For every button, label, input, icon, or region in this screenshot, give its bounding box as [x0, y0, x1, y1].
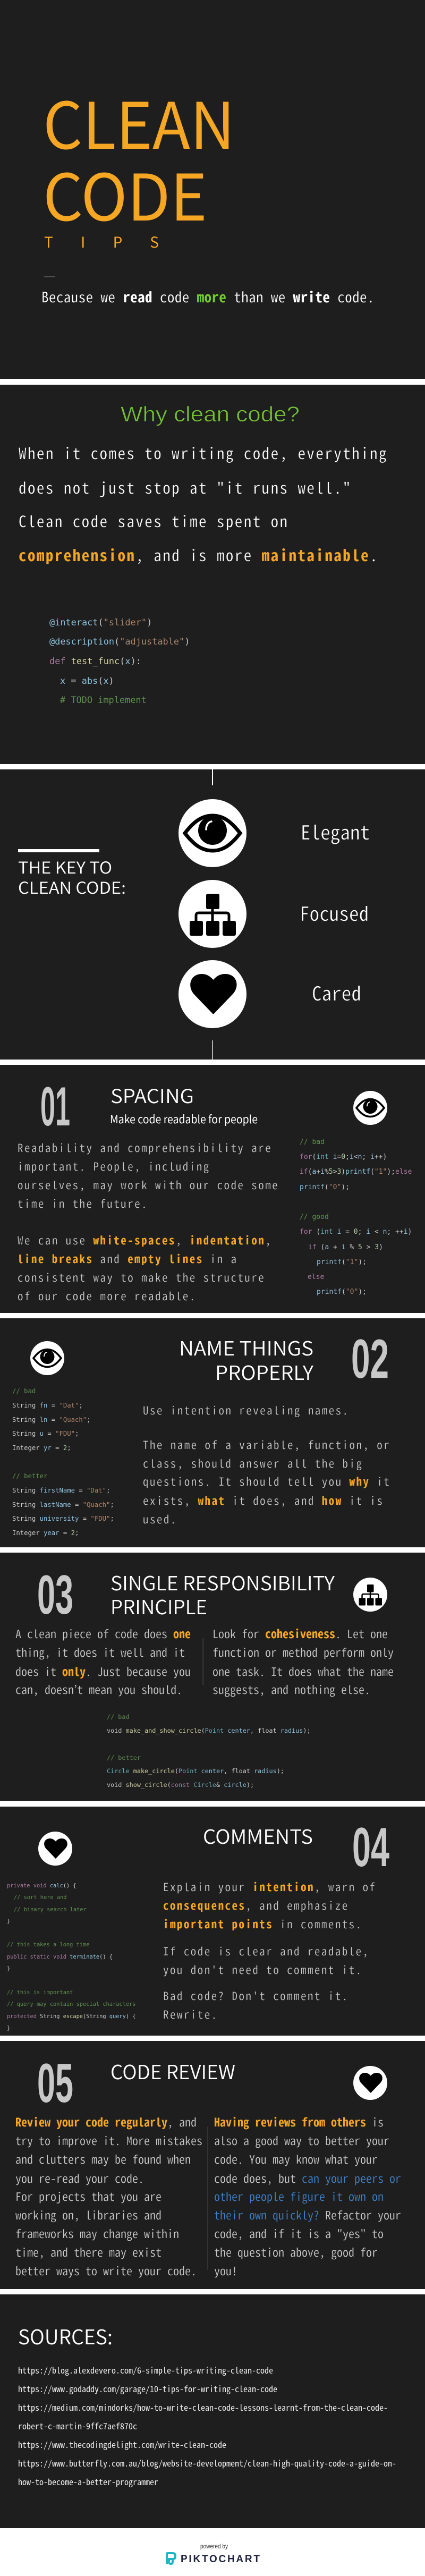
heading: single responsibility principle — [110, 1567, 335, 1620]
paragraph: comment advice: If code is clear and readable, — [163, 1943, 370, 1959]
source links: robert-c-martin-9ffc7aef870c — [18, 2419, 137, 2432]
code sample: circle: // better — [107, 1754, 141, 1761]
icon: eye — [30, 1341, 64, 1375]
paragraph: readability: We can use white-spaces, indentation, — [18, 1232, 272, 1248]
panel: hero — [0, 0, 425, 379]
paragraph: cohesiveness: function or method perform only — [212, 1643, 394, 1660]
subtitle: tips: TIPS — [44, 231, 159, 252]
paragraph: comment advice: Explain your intention, warn of — [163, 1879, 376, 1895]
paragraph: reviews from others: code does, but can your peers or — [214, 2170, 401, 2187]
number 02: 02 — [351, 1328, 389, 1390]
paragraph: review regularly: you re-read your code. — [15, 2170, 144, 2187]
code sample: names: String firstName = "Dat"; — [12, 1487, 110, 1494]
panel: 01 spacing — [0, 1065, 425, 1313]
heading: comments: COMMENTS — [203, 1821, 313, 1850]
paragraph: review regularly — [15, 2113, 202, 2279]
subheading: Make code readable for people — [110, 1111, 258, 1127]
code sample: names: String lastName = "Quach"; — [12, 1501, 114, 1509]
code sample: comments: // binary search later — [14, 1906, 87, 1913]
paragraph: one thing: A clean piece of code does one — [15, 1625, 191, 1642]
paragraph: review regularly: better ways to write your code. — [15, 2262, 197, 2279]
label: cared: Cared — [312, 978, 361, 1006]
code sample: comments — [7, 1883, 136, 2031]
code sample: comments: } — [7, 2025, 10, 2031]
code sample: comments: // this takes a long time — [7, 1942, 89, 1948]
heading: the key to clean code — [18, 849, 126, 899]
number 05: 05 — [37, 2053, 73, 2114]
code sample: decorators: x = abs(x) — [60, 675, 114, 686]
title: clean code: CLEAN — [43, 74, 235, 167]
code sample: names: String fn = "Dat"; — [12, 1402, 83, 1409]
paragraph: reviews from others: other people figure it own on — [214, 2188, 384, 2205]
code sample: bad and good loops: for (int i = 0; i < n; ++i) — [300, 1228, 412, 1236]
paragraph: why — [19, 442, 388, 566]
code sample: circle — [107, 1713, 311, 1789]
paragraph: cohesiveness: suggests, and nothing else. — [212, 1681, 370, 1698]
paragraph: reviews from others: Having reviews from others is — [214, 2113, 384, 2130]
paragraph: review regularly: and clutters may be found when — [15, 2150, 191, 2167]
paragraph: naming: questions. It should tell you why it — [143, 1473, 390, 1489]
code sample: bad and good loops: if(a+i%5>3)printf("1");else — [300, 1168, 412, 1176]
heading: the key to clean code: THE KEY TO — [18, 854, 112, 878]
paragraph: comment advice: consequences, and emphasize — [163, 1897, 349, 1913]
code sample: comments: } — [7, 1965, 10, 1972]
heading: name things properly: NAME THINGS — [179, 1333, 313, 1361]
code sample: circle: void make_and_show_circle(Point center, float radius); — [107, 1727, 311, 1734]
code sample: bad and good loops: for(int i=0;i<n; i++) — [300, 1153, 387, 1161]
code sample: decorators: def test_func(x): — [49, 656, 141, 666]
heading: spacing: SPACING — [110, 1081, 194, 1109]
code sample: names: // bad — [12, 1387, 36, 1395]
footer: powered by piktochart — [0, 2528, 425, 2576]
paragraph: naming: Use intention revealing names. — [143, 1402, 350, 1418]
heading: name things properly — [179, 1333, 314, 1386]
panel: why clean code — [0, 385, 425, 764]
icon: hierarchy — [178, 880, 246, 948]
paragraph: reviews from others: also a good way to better your — [214, 2132, 389, 2149]
footer: powered by piktochart: powered by — [200, 2543, 228, 2550]
paragraph: reviews from others: the question above, good for — [214, 2243, 378, 2260]
paragraph: readability: Readability and comprehensibility are — [18, 1140, 272, 1156]
paragraph: reviews from others: code. You may know what your — [214, 2150, 378, 2167]
code sample: comments: // query may contain special characters — [7, 2001, 136, 2007]
title: clean code: CODE — [43, 146, 207, 239]
icon: heart — [353, 2066, 387, 2100]
code sample: bad and good loops: printf("1"); — [317, 1258, 367, 1266]
title: clean code — [43, 74, 235, 239]
paragraph: why: comprehension, and is more maintainable. — [19, 544, 379, 566]
code sample: bad and good loops: // good — [300, 1213, 329, 1221]
heading: name things properly: PROPERLY — [215, 1357, 314, 1386]
source links: https://www.thecodingdelight.com/write-clean-code — [18, 2438, 226, 2451]
paragraph: one thing — [15, 1625, 191, 1698]
panel: the key to clean code — [0, 769, 425, 1060]
code sample: comments: } — [7, 1918, 10, 1925]
heading: sources: SOURCES: — [18, 2321, 113, 2350]
code sample: bad and good loops: else — [308, 1273, 324, 1281]
paragraph: cohesiveness — [212, 1625, 394, 1698]
paragraph: review regularly: try to improve it. More mistakes — [15, 2132, 202, 2149]
paragraph: review regularly: time, and there may exist — [15, 2243, 162, 2260]
footer: powered by piktochart: PIKTOCHART — [181, 2554, 260, 2565]
code sample: decorators: @description("adjustable") — [49, 636, 190, 647]
source links — [18, 2363, 396, 2488]
number 03: 03 — [37, 1564, 73, 1626]
code sample: names: // better — [12, 1472, 47, 1480]
code sample: decorators — [49, 617, 190, 705]
code sample: names: Integer yr = 2; — [12, 1444, 71, 1452]
code sample: circle: // bad — [107, 1713, 130, 1721]
heading: why clean code: Why clean code? — [121, 403, 300, 426]
icon: eye — [353, 1091, 387, 1125]
source links: https://blog.alexdevero.com/6-simple-tips-writing-clean-code — [18, 2363, 273, 2376]
paragraph: review regularly: working on, libraries and — [15, 2206, 162, 2223]
paragraph: naming: class, should answer all the big — [143, 1455, 363, 1471]
number 04: 04 — [352, 1817, 389, 1878]
code sample: decorators: # TODO implement — [60, 694, 147, 705]
paragraph: readability: of our code more readable. — [18, 1288, 197, 1304]
paragraph: reviews from others: their own quickly? Refactor your — [214, 2206, 401, 2223]
icon: eye — [178, 799, 246, 867]
paragraph: why: Clean code saves time spent on — [19, 510, 289, 532]
icon: heart — [38, 1832, 72, 1866]
paragraph: naming — [143, 1402, 390, 1527]
paragraph: readability: line breaks and empty lines in a — [18, 1251, 237, 1267]
paragraph: why: When it comes to writing code, everything — [19, 442, 388, 464]
code sample: bad and good loops — [300, 1138, 412, 1296]
code sample: comments: protected String escape(String query) { — [7, 2013, 136, 2020]
paragraph: naming: used. — [143, 1511, 177, 1527]
code sample: names: String u = "FDU"; — [12, 1430, 79, 1437]
paragraph: one thing: thing, it does it well and it — [15, 1643, 185, 1660]
tagline: Because we read code more than we write code. — [41, 286, 375, 307]
paragraph: one thing: can, doesn’t mean you should. — [15, 1681, 182, 1698]
panel: 04 comments — [0, 1807, 425, 2036]
label: focused: Focused — [300, 898, 369, 927]
source links: https://www.godaddy.com/garage/10-tips-for-writing-clean-code — [18, 2382, 277, 2395]
panel: 05 code review — [0, 2041, 425, 2289]
source links: https://www.butterfly.com.au/blog/website-development/clean-high-quality-code-a-guide-on- — [18, 2456, 396, 2469]
code sample: names: Integer year = 2; — [12, 1529, 79, 1537]
paragraph: naming: The name of a variable, function, or — [143, 1437, 390, 1453]
source links: how-to-become-a-better-programmer — [18, 2475, 158, 2488]
panel: 02 name things properly — [0, 1318, 425, 1547]
code sample: bad and good loops: if (a + i % 5 > 3) — [308, 1243, 383, 1251]
code sample: bad and good loops: // bad — [300, 1138, 325, 1146]
code sample: comments: // sort here and — [14, 1894, 67, 1901]
paragraph: cohesiveness: Look for cohesiveness. Let one — [212, 1625, 388, 1642]
source links: https://medium.com/mindorks/how-to-write-clean-code-lessons-learnt-from-the-clean-code- — [18, 2401, 388, 2413]
paragraph: reviews from others: you! — [214, 2262, 237, 2279]
paragraph: readability: time in the future. — [18, 1196, 148, 1211]
paragraph: readability: ourselves, may work with our code some — [18, 1177, 279, 1193]
paragraph: comment advice: important points in comments. — [163, 1916, 363, 1932]
code sample: bad and good loops: printf("0"); — [317, 1288, 367, 1296]
paragraph: comment advice — [163, 1879, 376, 2022]
code sample: comments: private void calc() { — [7, 1883, 76, 1889]
paragraph: reviews from others — [214, 2113, 401, 2279]
heading: single responsibility principle: PRINCIPLE — [110, 1591, 207, 1620]
code sample: circle: Circle make_circle(Point center, float radius); — [107, 1767, 284, 1775]
code sample: names — [12, 1387, 114, 1537]
code sample: comments: // this is important — [7, 1989, 73, 1996]
icon: heart — [178, 960, 246, 1028]
heading: the key to clean code: CLEAN CODE: — [18, 875, 126, 899]
panel: 03 single responsibility principle — [0, 1553, 425, 1801]
paragraph: review regularly: frameworks may change within — [15, 2225, 179, 2242]
icon: piktochart logo — [167, 2553, 175, 2564]
code sample: names: String ln = "Quach"; — [12, 1416, 91, 1423]
paragraph: review regularly: For projects that you are — [15, 2188, 162, 2205]
heading: code review: CODE REVIEW — [110, 2056, 235, 2085]
code sample: comments: public static void terminate() { — [7, 1954, 113, 1960]
paragraph: reviews from others: code, and if it is a "yes" to — [214, 2225, 384, 2242]
paragraph: one thing: does it only. Just because you — [15, 1663, 191, 1680]
heading: single responsibility principle: SINGLE RESPONSIBILITY — [110, 1567, 335, 1596]
label: elegant: Elegant — [301, 817, 370, 845]
paragraph: comment advice: Rewrite. — [163, 2006, 218, 2022]
code sample: decorators: @interact("slider") — [49, 617, 152, 628]
paragraph: review regularly: Review your code regularly, and — [15, 2113, 197, 2130]
panel: sources — [0, 2294, 425, 2528]
paragraph: readability — [18, 1140, 279, 1304]
paragraph: comment advice: Bad code? Don't comment it. — [163, 1988, 349, 2004]
paragraph: readability: important. People, including — [18, 1158, 210, 1174]
panel: 01 spacing: 01 — [40, 1076, 70, 1138]
paragraph: naming: exists, what it does, and how it is — [143, 1493, 384, 1509]
code sample: names: String university = "FDU"; — [12, 1515, 114, 1522]
code sample: bad and good loops: printf("0"); — [300, 1183, 350, 1191]
code sample: circle: void show_circle(const Circle& circle); — [107, 1781, 254, 1789]
paragraph: readability: consistent way to make the structure — [18, 1269, 265, 1285]
icon: hierarchy — [353, 1578, 387, 1612]
paragraph: cohesiveness: one task. It does what the name — [212, 1663, 394, 1680]
paragraph: why: does not just stop at "it runs well." — [19, 476, 352, 498]
paragraph: comment advice: you don't need to comment it. — [163, 1962, 363, 1978]
